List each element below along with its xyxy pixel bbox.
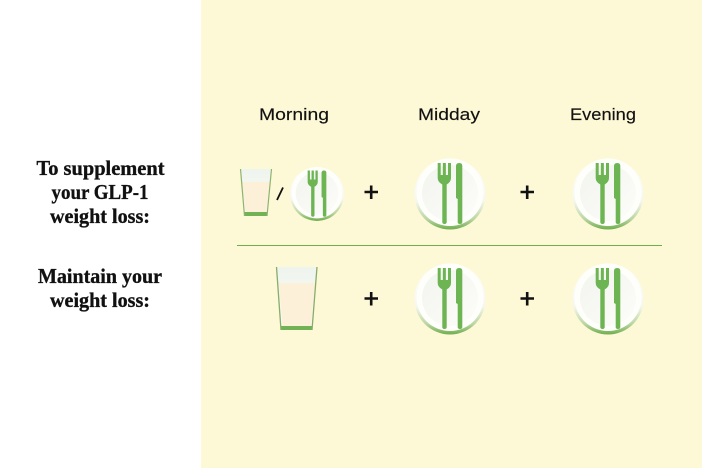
- icon: evening plate: [572, 158, 644, 230]
- icon: small plate with fork and knife: [290, 167, 344, 221]
- plus sign: [520, 292, 534, 306]
- icon: midday plate: [414, 158, 486, 230]
- icon: evening plate: [572, 264, 644, 334]
- row label: supplement GLP-1 weight loss: [36, 156, 164, 228]
- row label: maintain weight loss: Maintain your: [38, 264, 162, 288]
- slash: or: [277, 188, 283, 200]
- column heading: Evening: Evening: [570, 105, 636, 124]
- icon: midday plate: [414, 264, 486, 334]
- plus sign: [364, 292, 378, 306]
- column heading: Morning: Morning: [259, 105, 329, 124]
- row label: supplement GLP-1 weight loss: To supplement: [36, 156, 164, 180]
- row label: supplement GLP-1 weight loss: your GLP-1: [52, 180, 148, 204]
- row label: maintain weight loss: weight loss:: [50, 288, 150, 312]
- icon: large glass of shake: [276, 267, 317, 330]
- row label: supplement GLP-1 weight loss: weight loss:: [50, 204, 150, 228]
- cream background panel: [201, 0, 702, 468]
- row label: maintain weight loss: [38, 264, 162, 312]
- column heading: Midday: Midday: [418, 105, 481, 124]
- icon: small glass of shake: [240, 169, 272, 216]
- plus sign: [520, 186, 534, 199]
- plus sign: [364, 186, 378, 199]
